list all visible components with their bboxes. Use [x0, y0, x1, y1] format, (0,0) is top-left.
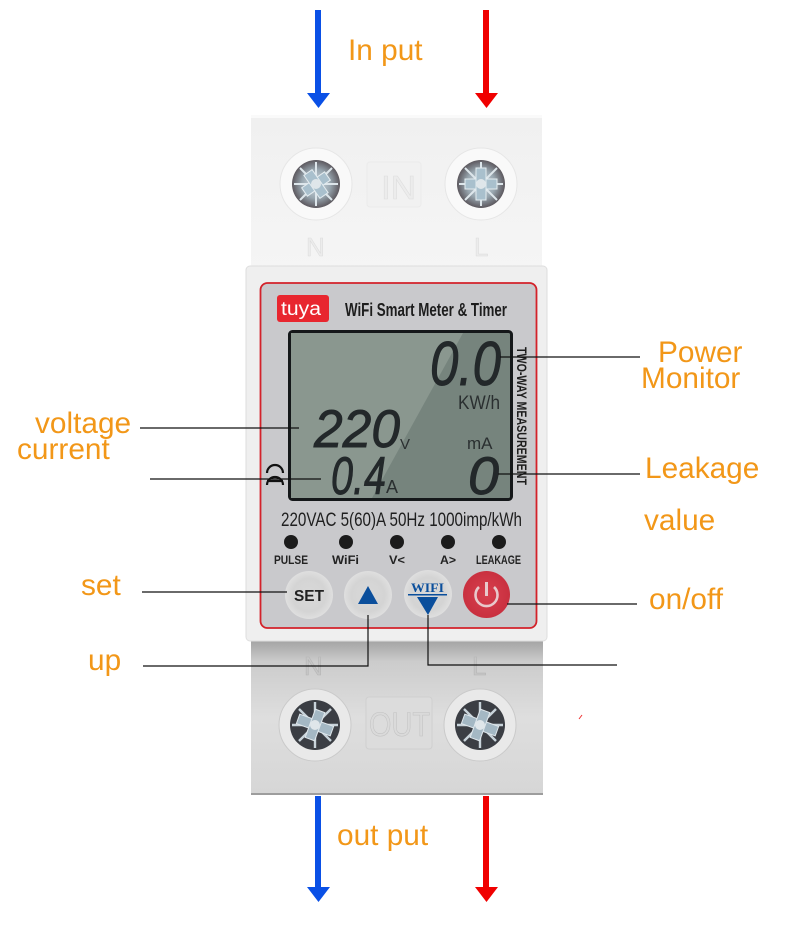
button: SET [285, 571, 333, 619]
label: voltage: voltage [35, 407, 131, 440]
reading: 0.4: 0.4 [331, 447, 386, 506]
embossed label: OUT: OUT [369, 706, 430, 744]
LED labels: V< [389, 553, 405, 567]
tuya logo [277, 295, 329, 322]
label: current: current [17, 433, 110, 466]
embossed label: N top: N [306, 232, 325, 262]
embossed label: IN: IN [381, 169, 416, 206]
device: bottom terminal block [251, 640, 543, 795]
leader line: up [143, 615, 368, 666]
label: out put: out put [337, 819, 429, 852]
LED labels: PULSE [274, 553, 308, 567]
button: WIFI down [404, 570, 452, 618]
tuya logo: tuya [281, 299, 321, 320]
ratings text: 220VAC 5(60)A 50Hz 1000imp/kWh [281, 510, 522, 531]
embossed label: L bottom: L [472, 651, 486, 681]
CE symbol [267, 465, 283, 485]
LED labels: A> [440, 553, 456, 567]
unit: KW/h: KW/h [458, 393, 500, 414]
label: on/off: on/off [649, 583, 724, 616]
device: top terminal block [251, 115, 542, 270]
leader line: wifi down [428, 615, 617, 665]
leader line: power monitor [500, 356, 640, 358]
screw terminal: top right [445, 148, 517, 220]
unit: A: A [386, 477, 398, 497]
front panel [260, 283, 536, 628]
label: Leakage: Leakage [645, 452, 759, 485]
leader line: leakage [498, 473, 640, 475]
arrow: input live red [475, 10, 498, 108]
arrow: input neutral blue [307, 10, 330, 108]
embossed label: L top: L [474, 232, 488, 262]
LCD screen [290, 330, 512, 506]
label: set: set [81, 569, 121, 602]
arrow: output neutral blue [307, 796, 330, 902]
reading: 0: 0 [468, 447, 500, 506]
stray mark [579, 715, 582, 719]
label: Power: Power [658, 336, 743, 369]
leader line: current [150, 478, 321, 480]
leader line: set [142, 591, 287, 593]
embossed label: N bottom: N [304, 651, 323, 681]
label: In put: In put [348, 34, 423, 67]
device: centre housing [246, 266, 547, 641]
leader line: voltage [140, 427, 299, 429]
screw terminal: bottom left [279, 689, 351, 761]
reading: 220: 220 [313, 400, 401, 459]
LED labels: WiFi [332, 553, 359, 567]
leader line: on/off [507, 603, 637, 605]
screw terminal: bottom right [444, 689, 516, 761]
label: up: up [88, 644, 121, 677]
unit: mA: mA [467, 434, 493, 453]
arrow: output live red [475, 796, 498, 902]
LED labels: LEAKAGE [476, 553, 521, 567]
product title: WiFi Smart Meter & Timer [345, 300, 507, 320]
indicator LEDs [284, 535, 506, 549]
screw terminal: top left [280, 148, 352, 220]
reading: 0.0: 0.0 [430, 330, 501, 399]
label: Monitor: Monitor [641, 362, 740, 395]
button: power [463, 571, 510, 618]
unit: V: V [400, 436, 410, 453]
LED labels [274, 553, 521, 567]
button: up [344, 571, 392, 619]
button: SET: SET [294, 588, 324, 605]
button: WIFI down: WIFI [411, 580, 444, 595]
label: value: value [644, 504, 715, 537]
side label: two-way measurement: TWO-WAY MEASUREMENT [514, 347, 530, 485]
